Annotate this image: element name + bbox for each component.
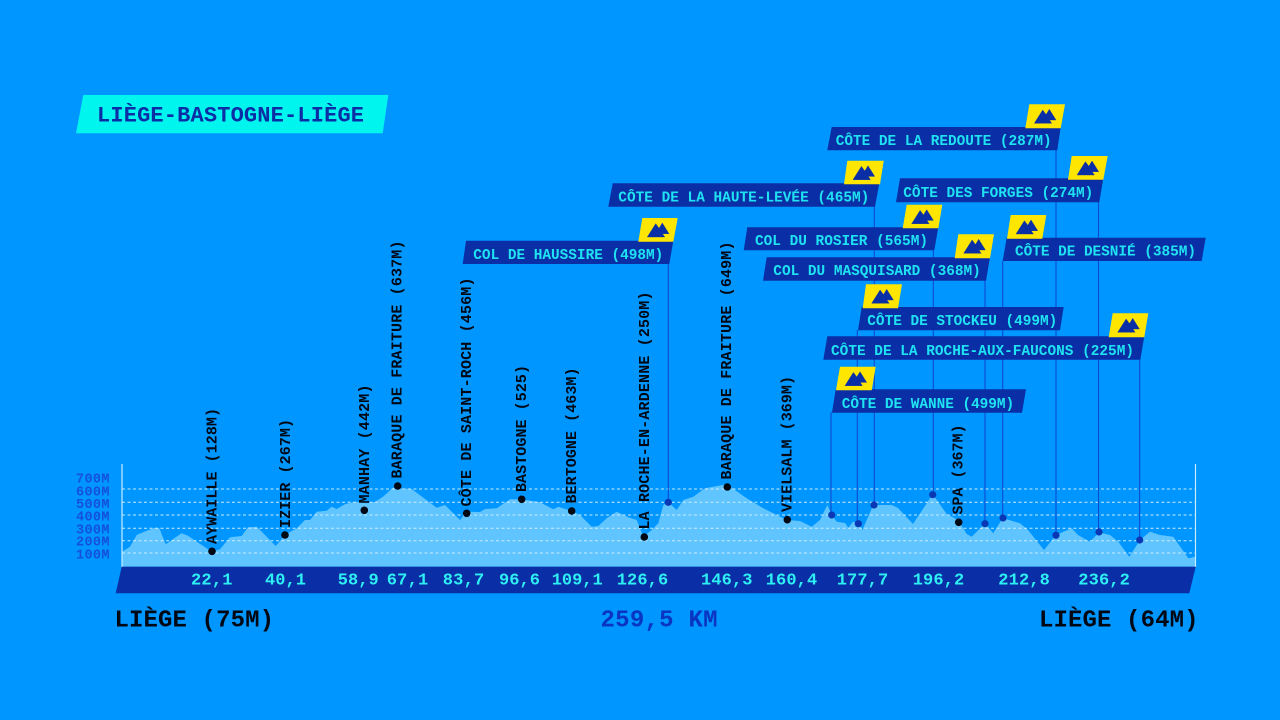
- altitude grid lines: [122, 489, 1195, 553]
- climb: Côte de la Redoute: CÔTE DE LA REDOUTE (287M): [836, 132, 1052, 150]
- finish label: LIÈGE (64M): [1039, 606, 1198, 634]
- total distance: 259,5 KM: [600, 608, 718, 634]
- distance band: 160,4: [766, 572, 817, 591]
- town: Côte de Saint-Roch: CÔTE DE SAINT-ROCH (456M): [458, 278, 476, 506]
- distance band: 236,2: [1078, 572, 1130, 591]
- town: Baraque de Fraiture: BARAQUE DE FRAITURE (637M): [390, 240, 407, 478]
- climb: Côte des Forges: [896, 156, 1108, 202]
- elevation profile chart: [76, 464, 1196, 567]
- town: Izier: IZIER (267M): [278, 419, 295, 528]
- start label: LIÈGE (75M): [114, 606, 274, 634]
- distance band: 96,6: [499, 572, 540, 591]
- elevation area: [122, 484, 1195, 566]
- distance band: 67,1: [387, 572, 428, 591]
- altitude labels: 500M: [76, 498, 110, 513]
- climb: Col du Masquisard: COL DU MASQUISARD (368M): [773, 264, 981, 280]
- town: Vielsalm: VIELSALM (369M): [780, 376, 797, 512]
- distance band: 177,7: [837, 572, 888, 591]
- climb: Côte de Wanne: [832, 367, 1026, 413]
- town: Aywaille: AYWAILLE (128M): [204, 408, 222, 544]
- altitude labels: 100M: [76, 548, 110, 564]
- climb: Côte de Desnié: [1003, 215, 1206, 261]
- climb: Côte de Desnié: CÔTE DE DESNIÉ (385M): [1015, 243, 1196, 261]
- climb: Col de Haussire: COL DE HAUSSIRE (498M): [473, 248, 663, 264]
- distance band: 146,3: [701, 572, 752, 591]
- altitude labels: 200M: [76, 536, 110, 550]
- title: [76, 95, 388, 133]
- distance band: 22,1: [191, 572, 232, 591]
- climb: Col du Rosier: [744, 205, 942, 250]
- town: Spa: SPA (367M): [951, 424, 968, 514]
- distance band: 196,2: [913, 572, 964, 591]
- altitude labels: 600M: [76, 486, 110, 500]
- town: Bertogne: BERTOGNE (463M): [564, 368, 581, 504]
- distance band: 109,1: [552, 572, 603, 591]
- town: Baraque de Fraiture 2: BARAQUE DE FRAITURE (649M): [719, 242, 736, 480]
- distance band: 126,6: [617, 572, 668, 591]
- climb: Col du Rosier: COL DU ROSIER (565M): [755, 234, 928, 250]
- climb: Côte de la Roche-aux-Faucons: [823, 313, 1148, 360]
- climb: Col du Masquisard: [763, 234, 994, 281]
- distance band: 83,7: [443, 572, 484, 591]
- altitude labels: 400M: [76, 510, 110, 526]
- climb: Col de Haussire: [463, 218, 678, 264]
- climb: Côte de la Haute-Levée: [608, 161, 884, 207]
- climb: Côte de la Redoute: [827, 104, 1065, 150]
- altitude labels: [76, 472, 110, 564]
- climb: Côte de la Haute-Levée: CÔTE DE LA HAUTE-LEVÉE (465M): [618, 189, 869, 207]
- distance band: [116, 567, 1196, 593]
- distance band: 58,9: [338, 572, 379, 591]
- climb: Côte de Stockeu: CÔTE DE STOCKEU (499M): [867, 312, 1057, 330]
- climb: Côte des Forges: CÔTE DES FORGES (274M): [903, 184, 1093, 202]
- town: Manhay: MANHAY (442M): [357, 384, 374, 504]
- title: LIÈGE-BASTOGNE-LIÈGE: [97, 102, 364, 128]
- altitude labels: 700M: [76, 472, 110, 488]
- climb: Côte de la Roche-aux-Faucons: CÔTE DE LA ROCHE-AUX-FAUCONS (225M): [831, 342, 1134, 360]
- climb: Côte de Wanne: CÔTE DE WANNE (499M): [842, 395, 1014, 413]
- distance band: 40,1: [265, 572, 306, 591]
- left axis: [121, 464, 123, 567]
- climb: Côte de Stockeu: [858, 284, 1064, 330]
- altitude labels: 300M: [76, 524, 110, 538]
- distance band: 212,8: [998, 572, 1050, 591]
- town: La Roche-en-Ardenne: LA ROCHE-EN-ARDENNE (250M): [637, 292, 654, 530]
- climb leader lines and markers: [665, 150, 1143, 544]
- right axis: [1194, 464, 1196, 567]
- town: Bastogne: BASTOGNE (525): [514, 365, 531, 492]
